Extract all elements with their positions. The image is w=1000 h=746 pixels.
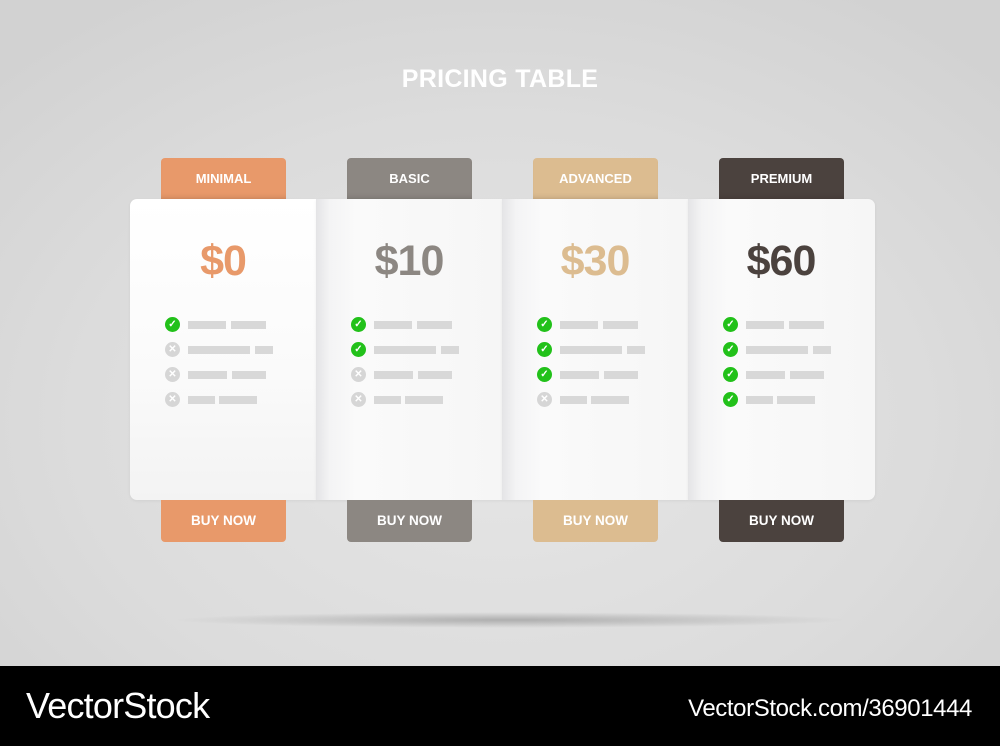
feature row 4: ✕ — [354, 394, 363, 405]
panel: basic — [316, 199, 502, 500]
feature row 2: ✓ — [726, 344, 735, 355]
column: premium — [688, 158, 875, 542]
feature row 1 — [723, 317, 824, 332]
button: minimal: BUY NOW — [191, 513, 256, 528]
tab: basic: BASIC — [389, 171, 430, 186]
feature row 4: ✕ — [168, 394, 177, 405]
feature row 4: ✕ — [540, 394, 549, 405]
feature row 4 — [537, 392, 629, 407]
button: basic — [347, 500, 472, 542]
tab: advanced — [533, 158, 658, 200]
feature row 3 — [165, 367, 266, 382]
footer bar — [0, 666, 1000, 746]
price: $30: $30 — [561, 237, 629, 285]
button: premium: BUY NOW — [749, 513, 814, 528]
feature row 2 — [351, 342, 459, 357]
feature row 3 — [723, 367, 824, 382]
column: basic — [316, 158, 502, 542]
feature row 1: ✓ — [168, 319, 177, 330]
price: $60: $60 — [747, 237, 815, 285]
feature row 2: ✓ — [540, 344, 549, 355]
tab: minimal — [161, 158, 286, 200]
title: PRICING TABLE — [402, 65, 598, 93]
feature row 4: ✓ — [726, 394, 735, 405]
button: basic: BUY NOW — [377, 513, 442, 528]
panel: advanced — [502, 199, 688, 500]
feature row 4 — [351, 392, 443, 407]
column: advanced — [502, 158, 688, 542]
panel: premium — [688, 199, 875, 500]
feature row 3: ✕ — [354, 369, 363, 380]
feature row 3 — [537, 367, 638, 382]
feature row 3 — [351, 367, 452, 382]
price: $10: $10 — [375, 237, 443, 285]
price: $0: $0 — [200, 237, 246, 285]
feature row 2 — [537, 342, 645, 357]
feature row 3: ✓ — [726, 369, 735, 380]
feature row 3: ✕ — [168, 369, 177, 380]
feature row 2: ✓ — [354, 344, 363, 355]
feature row 2 — [165, 342, 273, 357]
panel: minimal — [130, 199, 316, 500]
button: minimal — [161, 500, 286, 542]
button: advanced: BUY NOW — [563, 513, 628, 528]
tab: advanced: ADVANCED — [559, 171, 632, 186]
feature row 2: ✕ — [168, 344, 177, 355]
footer logo: VectorStock — [26, 685, 209, 726]
tab: basic — [347, 158, 472, 200]
tab: minimal: MINIMAL — [196, 171, 251, 186]
feature row 3: ✓ — [540, 369, 549, 380]
feature row 1: ✓ — [354, 319, 363, 330]
feature row 4 — [165, 392, 257, 407]
tab: premium — [719, 158, 844, 200]
feature row 2 — [723, 342, 831, 357]
tab: premium: PREMIUM — [751, 171, 812, 186]
feature row 1 — [537, 317, 638, 332]
feature row 4 — [723, 392, 815, 407]
feature row 1 — [165, 317, 266, 332]
floor shadow — [170, 612, 850, 628]
button: advanced — [533, 500, 658, 542]
feature row 1 — [351, 317, 452, 332]
footer url: VectorStock.com/36901444 — [688, 695, 972, 722]
column: minimal — [130, 158, 316, 542]
feature row 1: ✓ — [540, 319, 549, 330]
button: premium — [719, 500, 844, 542]
feature row 1: ✓ — [726, 319, 735, 330]
